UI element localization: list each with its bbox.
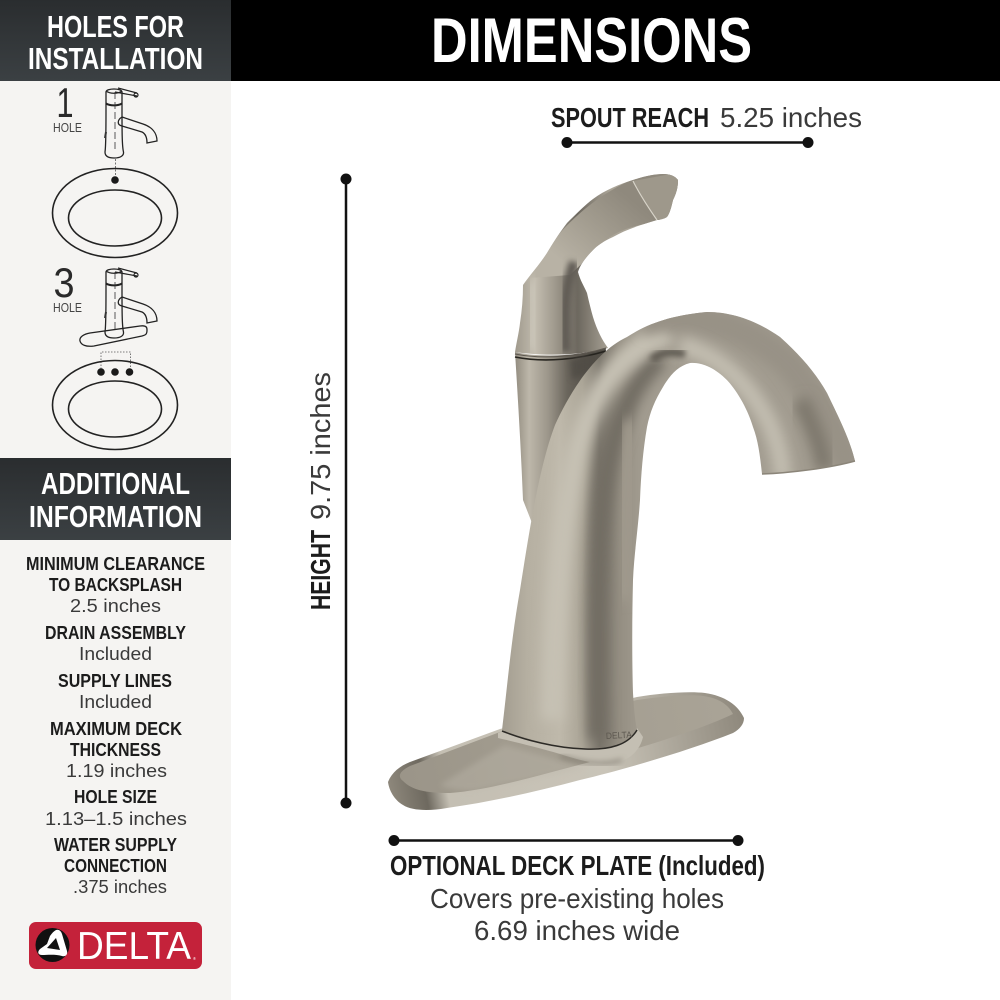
spec: minimum clearance: MINIMUM CLEARANCE	[26, 554, 205, 574]
product: brushed nickel faucet	[388, 172, 855, 810]
icon: faucet line drawing	[105, 88, 157, 158]
spec: hole size: HOLE SIZE	[74, 787, 157, 807]
spec: supply lines: SUPPLY LINES	[58, 671, 172, 691]
heading: holes for installation	[0, 0, 231, 81]
heading: additional information: ADDITIONAL	[41, 466, 190, 501]
panel: one hole installation diagram	[52, 79, 178, 258]
dimension: height	[305, 174, 352, 808]
spec: water supply connection: .375 inches	[73, 877, 167, 897]
spec: drain assembly: DRAIN ASSEMBLY	[45, 623, 186, 643]
dimension: optional deck plate: OPTIONAL DECK PLATE (Included)	[390, 850, 765, 881]
lever handle	[515, 172, 682, 355]
heading: additional information: INFORMATION	[29, 499, 202, 534]
title banner: dimensions: DIMENSIONS	[431, 6, 752, 76]
icon: sink with one hole	[52, 159, 178, 258]
spec: supply lines: Included	[79, 692, 152, 712]
logo: delta: DELTA	[77, 925, 191, 968]
dimension: spout reach: SPOUT REACH	[551, 102, 709, 133]
label: 1 hole	[53, 79, 82, 135]
spec: supply lines	[58, 671, 172, 712]
heading: holes for installation: HOLES FOR	[47, 9, 184, 44]
left sidebar panel	[0, 0, 231, 1000]
dimension: height: 9.75 inches	[305, 372, 336, 520]
spec: drain assembly: Included	[79, 644, 152, 664]
logo: delta: ®	[193, 956, 196, 961]
deck plate	[388, 692, 744, 810]
spec: maximum deck thickness: THICKNESS	[70, 740, 161, 760]
spec: maximum deck thickness	[50, 719, 182, 781]
spec: drain assembly	[45, 623, 186, 664]
collar ring	[515, 348, 606, 380]
dimension: spout reach	[551, 102, 862, 148]
spec: maximum deck thickness: MAXIMUM DECK	[50, 719, 182, 739]
engraved delta mark: DELTA	[606, 730, 632, 741]
dimension: optional deck plate	[388, 835, 765, 946]
label: 1 hole: HOLE	[53, 121, 82, 135]
dimension: height: HEIGHT	[305, 530, 336, 610]
spec: water supply connection	[54, 835, 177, 897]
spec: hole size	[45, 787, 187, 829]
heading: additional information	[0, 458, 231, 540]
spec: water supply connection: WATER SUPPLY	[54, 835, 177, 855]
spec: hole size: 1.13–1.5 inches	[45, 809, 187, 829]
spec: minimum clearance: 2.5 inches	[70, 596, 161, 616]
text block: additional information specs	[26, 554, 205, 897]
spec: minimum clearance	[26, 554, 205, 616]
spec: minimum clearance: TO BACKSPLASH	[49, 575, 182, 595]
logo: delta	[29, 922, 202, 969]
dimension: spout reach: 5.25 inches	[720, 102, 862, 133]
panel: three hole installation diagram	[52, 259, 178, 450]
label: 3 hole	[53, 259, 82, 315]
heading: holes for installation: INSTALLATION	[28, 41, 203, 76]
icon: faucet with deck plate line drawing	[80, 268, 157, 346]
title banner: dimensions	[231, 0, 1000, 81]
icon: sink with three holes	[52, 352, 178, 450]
base seam	[502, 730, 637, 749]
label: 1 hole: 1	[56, 79, 74, 126]
label: 3 hole: HOLE	[53, 301, 82, 315]
spec: water supply connection: CONNECTION	[64, 856, 167, 876]
stem behind spout	[515, 348, 606, 523]
label: 3 hole: 3	[54, 259, 74, 306]
spec: maximum deck thickness: 1.19 inches	[66, 761, 167, 781]
curved spout	[502, 312, 855, 748]
dimension: optional deck plate: 6.69 inches wide	[474, 915, 680, 946]
dimension: optional deck plate: Covers pre-existing holes	[430, 883, 724, 914]
